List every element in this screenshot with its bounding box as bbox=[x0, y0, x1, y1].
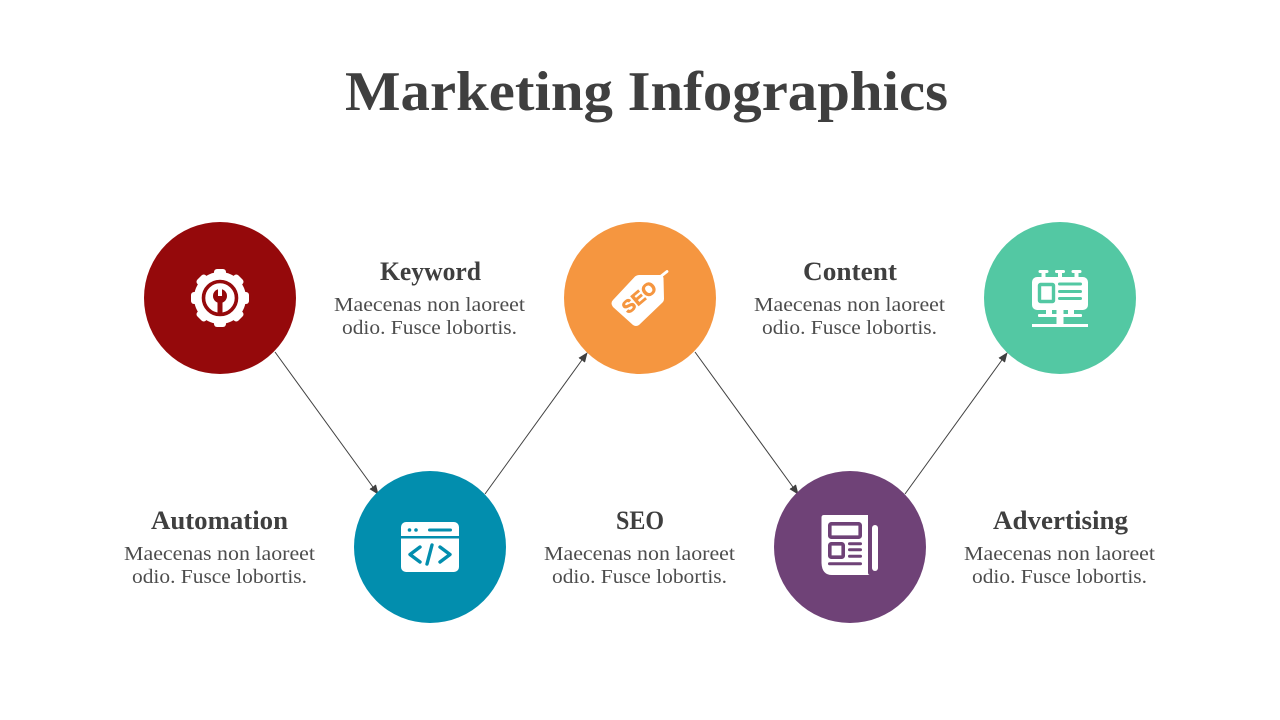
text block: SEO: SEO bbox=[616, 506, 664, 535]
title: Marketing Infographics bbox=[345, 61, 948, 123]
text block: automation bbox=[124, 506, 315, 588]
text block: automation: odio. Fusce lobortis. bbox=[132, 566, 307, 588]
text block: SEO bbox=[544, 506, 735, 588]
arrow: keyword to SEO bbox=[485, 353, 587, 494]
text block: advertising: Advertising bbox=[993, 506, 1128, 535]
text block: SEO: odio. Fusce lobortis. bbox=[552, 566, 727, 588]
text block: keyword bbox=[334, 257, 525, 339]
text block: keyword: odio. Fusce lobortis. bbox=[342, 317, 517, 339]
text block: advertising: Maecenas non laoreet bbox=[964, 543, 1155, 565]
text block: content: odio. Fusce lobortis. bbox=[762, 317, 937, 339]
node: automation circle with gear icon bbox=[144, 222, 296, 374]
text block: keyword: Keyword bbox=[380, 257, 482, 286]
text block: content: Content bbox=[803, 257, 897, 286]
icon: gear with wrench bbox=[191, 269, 249, 327]
node: content circle with newspaper icon bbox=[774, 471, 926, 623]
arrow: content to advertising bbox=[905, 353, 1007, 494]
text block: SEO: Maecenas non laoreet bbox=[544, 543, 735, 565]
arrow: SEO to content bbox=[695, 352, 798, 494]
icon: SEO price tag bbox=[612, 272, 667, 326]
text block: automation: Automation bbox=[151, 506, 289, 535]
arrow: automation to keyword bbox=[275, 352, 378, 494]
icon: browser code window bbox=[401, 522, 459, 572]
text block: advertising bbox=[964, 506, 1155, 588]
text block: content bbox=[754, 257, 945, 339]
icon: billboard bbox=[1032, 270, 1088, 327]
icon: newspaper bbox=[822, 515, 878, 575]
node: keyword circle with SEO tag icon bbox=[564, 222, 716, 374]
text block: content: Maecenas non laoreet bbox=[754, 294, 945, 316]
text block: automation: Maecenas non laoreet bbox=[124, 543, 315, 565]
text block: advertising: odio. Fusce lobortis. bbox=[972, 566, 1147, 588]
text block: keyword: Maecenas non laoreet bbox=[334, 294, 525, 316]
node: SEO circle with code icon bbox=[354, 471, 506, 623]
node: advertising circle with billboard icon bbox=[984, 222, 1136, 374]
icon: SEO price tag: SEO bbox=[618, 277, 661, 318]
